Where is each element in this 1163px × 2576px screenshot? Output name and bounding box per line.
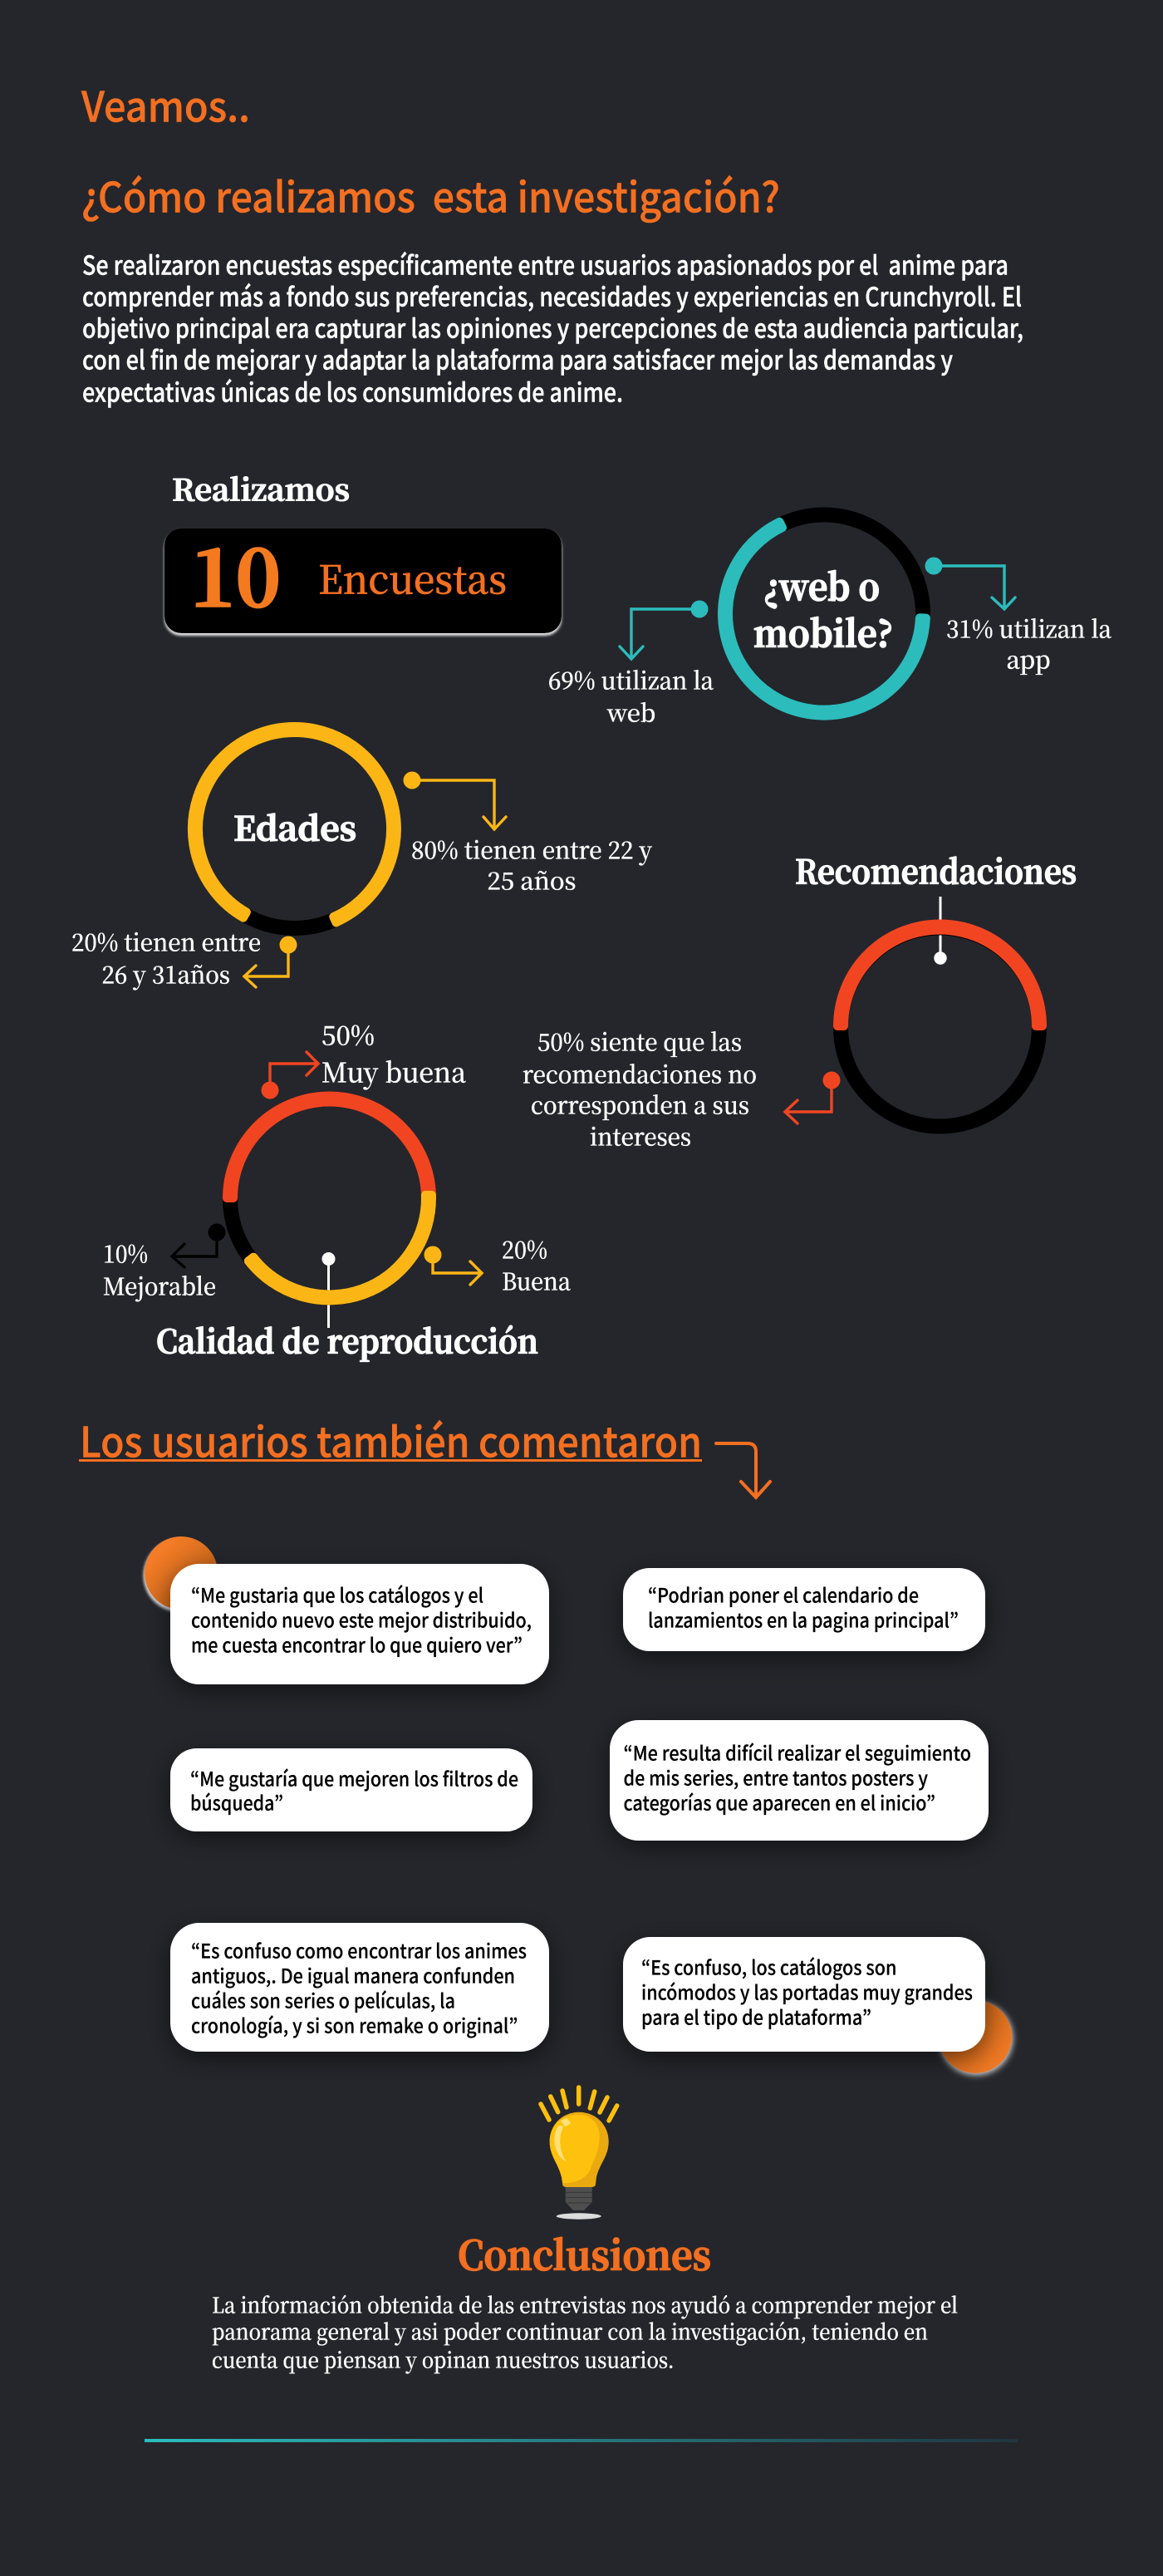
intro paragraph: con el fin de mejorar y adaptar la plataforma para satisfacer mejor las demandas y (82, 339, 953, 377)
comment card 2 (623, 1568, 985, 1651)
callout: 50% recommendations: corresponden a sus (531, 1087, 749, 1122)
title: Veamos: Veamos.. (81, 75, 250, 135)
label: Realizamos: Realizamos (172, 467, 350, 510)
intro paragraph: objetivo principal era capturar las opiniones y percepciones de esta audiencia particular, (82, 307, 1023, 346)
comment card 2: “Podrian poner el calendario de (648, 1579, 919, 1609)
callout: 80% ages: 25 años (487, 863, 577, 897)
intro paragraph (82, 244, 1023, 409)
comment card 3 (170, 1748, 532, 1831)
comment card 5 (170, 1923, 549, 2052)
chart: web o mobile donut: mobile? (753, 605, 893, 658)
callout: 69% web: 69% utilizan la (548, 663, 714, 696)
intro paragraph: comprender más a fondo sus preferencias, necesidades y experiencias en Crunchyroll. El (82, 276, 1022, 314)
comment card 5: cuáles son series o películas, la (191, 1984, 455, 2014)
icon: light bulb (541, 2087, 617, 2220)
callout: 20% ages (71, 924, 297, 991)
comment card 1 (170, 1564, 549, 1684)
chart: Edades donut: Edades (233, 803, 356, 851)
callout: 20% ages: 26 y 31años (101, 957, 230, 991)
comment card 6 (623, 1937, 985, 2052)
callout: 31% app (925, 557, 1112, 676)
comment card 6: incómodos y las portadas muy grandes (641, 1976, 973, 2006)
panel: 10 encuestas: 10 (190, 515, 281, 630)
conclusion paragraph: La información obtenida de las entrevistas nos ayudó a comprender mejor el (212, 2288, 958, 2320)
callout: 10% Mejorable: 10% (103, 1236, 148, 1270)
callout: 31% app: 31% utilizan la (946, 612, 1112, 645)
comment card 1: “Me gustaria que los catálogos y el (191, 1579, 483, 1609)
heading: Calidad de reproducción: Calidad de reproducción (156, 1316, 538, 1363)
chart: Edades donut (192, 726, 397, 928)
heading: how the research was done: ¿Cómo realizamos esta investigación? (81, 165, 780, 224)
chart: Calidad de reproducción donut (227, 1096, 432, 1328)
intro paragraph: Se realizaron encuestas específicamente entre usuarios apasionados por el anime para (82, 244, 1008, 283)
comment card 1: me cuesta encontrar lo que quiero ver” (191, 1629, 523, 1659)
callout: 31% app: app (1006, 642, 1051, 676)
arrow: to comments (716, 1443, 770, 1497)
callout: 50% Muy buena (261, 1015, 466, 1099)
callout: 50% recommendations: intereses (590, 1118, 691, 1153)
panel: 10 encuestas: Encuestas (318, 550, 507, 605)
callout: 50% recommendations (523, 1024, 841, 1153)
heading: Los usuarios también comentaron: Los usuarios también comentaron (80, 1409, 702, 1469)
conclusion paragraph: panorama general y asi poder continuar con la investigación, teniendo en (212, 2315, 928, 2347)
callout: 50% Muy buena: 50% (321, 1015, 375, 1054)
callout: 50% recommendations: 50% siente que las (537, 1024, 742, 1059)
callout: 50% Muy buena: Muy buena (321, 1052, 466, 1090)
heading: Conclusiones: Conclusiones (458, 2224, 711, 2282)
callout: 20% Buena: 20% (502, 1231, 547, 1266)
comment card 6: para el tipo de plataforma” (641, 2001, 871, 2031)
callout: 20% Buena (424, 1231, 572, 1298)
chart: Recomendaciones donut (837, 897, 1043, 1127)
callout: 20% Buena: Buena (502, 1263, 572, 1298)
comment card 5: “Es confuso como encontrar los animes (191, 1934, 527, 1964)
callout: 10% Mejorable (103, 1223, 226, 1303)
callout: 50% recommendations: recomendaciones no (523, 1057, 757, 1090)
comment card 5: cronología, y si son remake o original” (191, 2009, 518, 2039)
comment card 4 (610, 1720, 989, 1841)
callout: 80% ages: 80% tienen entre 22 y (411, 833, 653, 866)
comment card 1: contenido nuevo este mejor distribuido, (191, 1604, 532, 1634)
icon: orange circle bottom (939, 2000, 1012, 2073)
conclusion paragraph (212, 2288, 958, 2375)
panel: 10 encuestas (164, 515, 562, 633)
comment card 4: “Me resulta difícil realizar el seguimiento (623, 1737, 971, 1767)
callout: 69% web: web (606, 695, 655, 730)
comment card 5: antiguos,. De igual manera confunden (191, 1959, 515, 1989)
chart: web o mobile donut: ¿web o (763, 558, 880, 612)
comment card 3: búsqueda” (190, 1787, 283, 1816)
icon: orange circle top (145, 1536, 218, 1610)
heading: Recomendaciones: Recomendaciones (795, 846, 1077, 894)
callout: 20% ages: 20% tienen entre (71, 924, 261, 959)
comment card 3: “Me gustaría que mejoren los filtros de (190, 1763, 518, 1792)
callout: 80% ages (404, 771, 653, 897)
comment card 4: de mis series, entre tantos posters y (623, 1762, 928, 1792)
comment card 2: lanzamientos en la pagina principal” (648, 1604, 959, 1634)
callout: 10% Mejorable: Mejorable (103, 1268, 216, 1303)
callout: 69% web (548, 600, 714, 730)
comment card 6: “Es confuso, los catálogos son (641, 1951, 897, 1981)
conclusion paragraph: cuenta que piensan y opinan nuestros usuarios. (212, 2343, 675, 2375)
chart: web o mobile donut (722, 515, 926, 716)
comment card 4: categorías que aparecen en el inicio” (623, 1787, 935, 1816)
intro paragraph: expectativas únicas de los consumidores de anime. (82, 372, 623, 409)
